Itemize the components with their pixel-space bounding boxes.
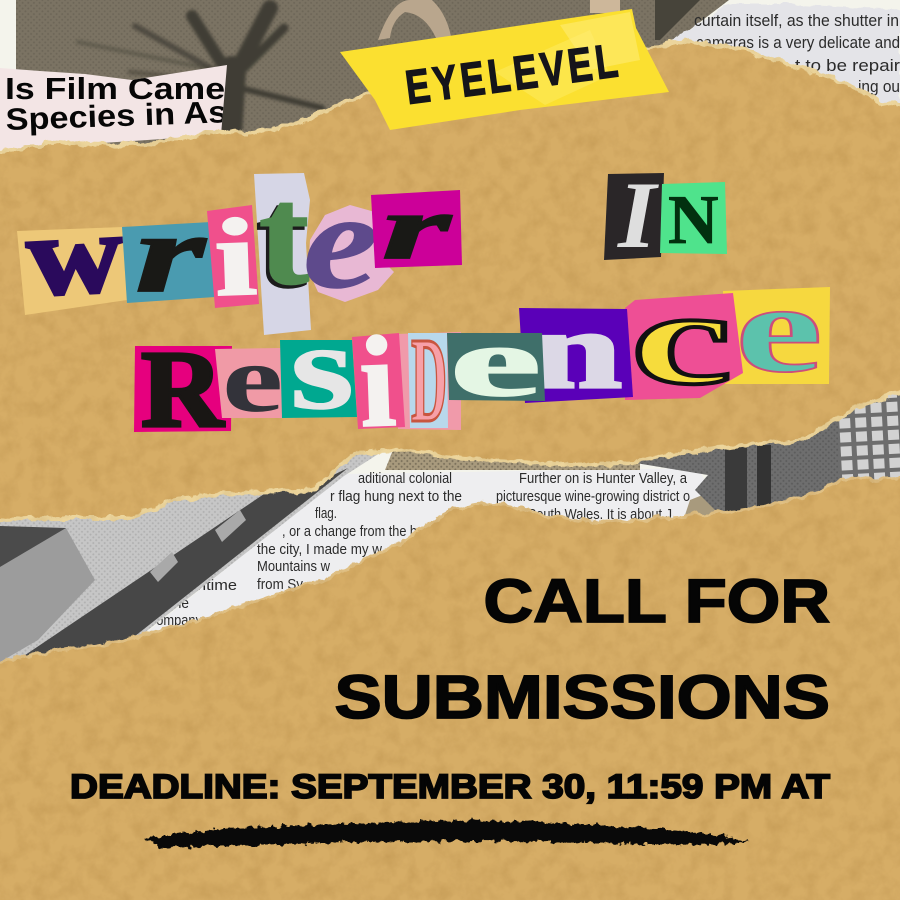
letter R: R bbox=[141, 329, 224, 451]
book page scrap: middle text: r flag hung next to the bbox=[330, 488, 462, 505]
photo: palm tree collage scrap bbox=[16, 0, 729, 170]
letter w: w bbox=[24, 190, 126, 320]
book page scrap: middle text: lew South Wales. It is about J bbox=[505, 506, 672, 523]
letter c: c bbox=[631, 265, 732, 412]
letter D: D bbox=[411, 314, 447, 448]
letter e: e bbox=[450, 307, 541, 417]
heading: Call for Submissions bbox=[334, 567, 830, 731]
book page scrap: middle text: ntime bbox=[197, 577, 237, 594]
title: Writer In Residence cut-out letters bbox=[17, 158, 830, 455]
letter D bbox=[396, 314, 461, 448]
letter t: t bbox=[256, 161, 306, 317]
book page scrap: top right: t to be repair bbox=[795, 56, 900, 75]
letter e: e bbox=[303, 165, 378, 317]
heading: Call for Submissions: CALL FOR bbox=[484, 567, 830, 635]
letter e: e bbox=[735, 259, 823, 398]
letter t: t bbox=[259, 158, 309, 314]
book page scrap: top right bbox=[654, 4, 900, 125]
book page scrap: middle text: aditional colonial bbox=[358, 470, 452, 487]
letter r: r bbox=[135, 192, 207, 316]
book page scrap: middle text: , or a change from the h bbox=[282, 523, 417, 540]
letter N: N bbox=[668, 182, 719, 259]
letter s: s bbox=[290, 300, 354, 435]
book page scrap: middle text: from Sy bbox=[257, 576, 303, 593]
letter i: i bbox=[213, 197, 259, 319]
torn kraft paper: lower sheet bbox=[0, 478, 900, 900]
brush stroke underline bbox=[146, 820, 752, 848]
book page scrap: middle text: the city, I made my w bbox=[257, 541, 382, 558]
heading: Call for Submissions: SUBMISSIONS bbox=[334, 663, 830, 731]
letter i: i bbox=[357, 310, 398, 455]
book page scrap: middle text: ance bbox=[130, 629, 156, 646]
masking tape label: EYELEVEL: EYELEVEL bbox=[402, 33, 624, 114]
torn kraft paper: upper sheet bbox=[0, 40, 900, 520]
letter r: r bbox=[382, 178, 452, 278]
newspaper scrap: headline clipping: Species in As bbox=[5, 94, 228, 137]
letter I: I bbox=[617, 162, 660, 268]
masking tape label: EYELEVEL bbox=[340, 9, 669, 130]
book page scrap: middle text: the bbox=[170, 595, 189, 612]
book page scrap: middle text: picturesque wine-growing district o bbox=[496, 488, 690, 505]
book page scrap: middle text: flag. bbox=[315, 505, 337, 522]
book page scrap: middle text: Mountains w bbox=[257, 558, 330, 575]
photo: halftone strip and buildings, middle right bbox=[385, 380, 900, 530]
book page scrap: middle text: Company bbox=[147, 612, 202, 629]
photo: road scene, middle left bbox=[0, 440, 400, 690]
letter e: e bbox=[222, 325, 283, 432]
deadline text: DEADLINE: SEPTEMBER 30, 11:59 PM AT bbox=[70, 767, 830, 806]
letter I bbox=[604, 162, 664, 268]
newspaper scrap: headline clipping: Is Film Came bbox=[5, 72, 225, 105]
book page scrap: middle text bbox=[125, 468, 708, 650]
newspaper scrap: headline clipping bbox=[0, 65, 227, 150]
letter n: n bbox=[530, 290, 622, 411]
book page scrap: middle text: Further on is Hunter Valley, a bbox=[519, 470, 688, 487]
